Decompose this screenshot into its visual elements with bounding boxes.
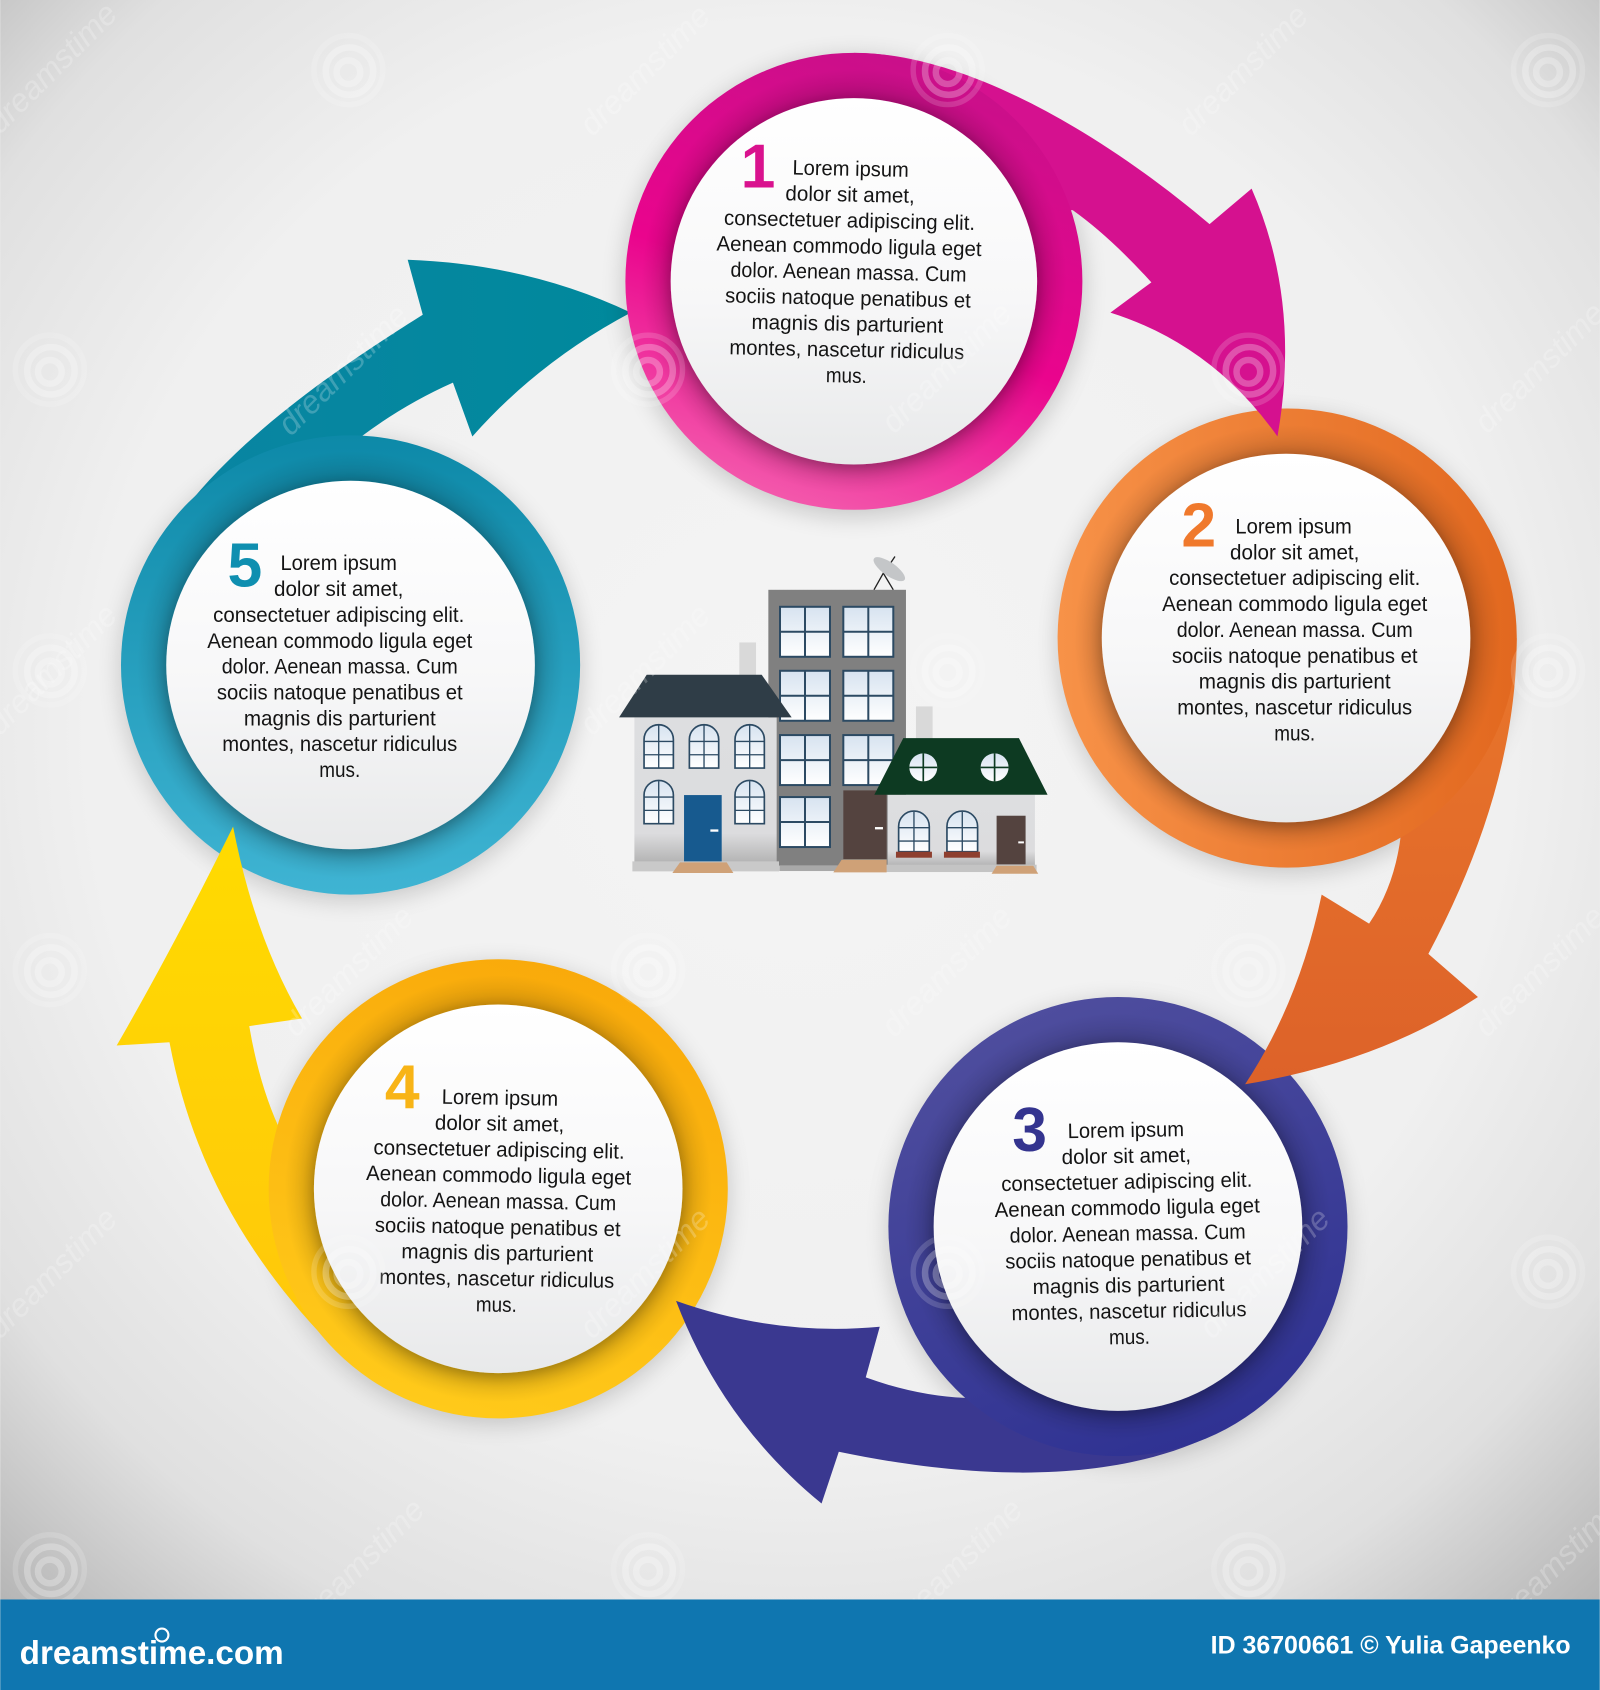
illustration: buildings xyxy=(619,553,1048,874)
ring: magenta xyxy=(625,53,1082,510)
text block 5 xyxy=(207,552,473,782)
text block 3: Lorem ipsum xyxy=(1067,1118,1184,1143)
white disc 2 xyxy=(1102,454,1470,822)
text block 3: mus. xyxy=(1109,1326,1150,1349)
number 1: 1 xyxy=(741,132,775,202)
number 5: 5 xyxy=(228,530,262,600)
white disc 4 xyxy=(314,1005,683,1373)
text block 3: magnis dis parturient xyxy=(1032,1273,1225,1299)
text block 2: Lorem ipsum xyxy=(1235,516,1352,539)
watermark pattern: dreamstime xyxy=(276,898,421,1043)
text block 4: dolor. Aenean massa. Cum xyxy=(380,1188,616,1215)
arrow: teal xyxy=(122,260,631,665)
footer credit: ID 36700661 © Yulia Gapeenko xyxy=(1211,1632,1571,1659)
ring: teal xyxy=(121,435,580,895)
arrow: magenta xyxy=(854,53,1285,437)
white disc 5 xyxy=(166,481,535,849)
text block 2 xyxy=(1162,516,1427,745)
text block 3: sociis natoque penatibus et xyxy=(1005,1246,1251,1274)
text block 2: Aenean commodo ligula eget xyxy=(1162,593,1427,616)
text block 5: dolor. Aenean massa. Cum xyxy=(222,656,458,679)
text block 5: dolor sit amet, xyxy=(274,578,403,601)
text block 2: montes, nascetur ridiculus xyxy=(1177,697,1412,720)
white disc 3 xyxy=(934,1042,1302,1411)
text block 1: dolor. Aenean massa. Cum xyxy=(730,259,967,287)
arrow: orange xyxy=(1245,638,1517,1084)
panel: step 1 xyxy=(624,53,1285,516)
text block 1: Lorem ipsum xyxy=(792,156,909,182)
watermark pattern: dreamstime xyxy=(1170,0,1315,142)
right house xyxy=(833,706,1048,874)
text block 2: consectetuer adipiscing elit. xyxy=(1169,567,1420,590)
arrow: yellow xyxy=(117,827,367,1350)
white disc 1 xyxy=(671,98,1037,465)
watermark pattern: dreamstime xyxy=(1192,1200,1337,1345)
text block 1: consectetuer adipiscing elit. xyxy=(724,207,975,235)
number 4: 4 xyxy=(385,1052,420,1122)
text block 2: sociis natoque penatibus et xyxy=(1172,645,1418,668)
text block 4: magnis dis parturient xyxy=(401,1240,594,1267)
watermark pattern: dreamstime xyxy=(874,295,1019,440)
text block 4: consectetuer adipiscing elit. xyxy=(373,1136,625,1164)
text block 1 xyxy=(714,155,984,390)
tower block xyxy=(768,590,906,871)
text block 5: sociis natoque penatibus et xyxy=(217,681,463,704)
text block 5: montes, nascetur ridiculus xyxy=(222,733,457,756)
text block 4 xyxy=(364,1084,633,1319)
text block 2: mus. xyxy=(1274,722,1315,745)
watermark pattern: dreamstime xyxy=(874,898,1019,1043)
text block 3: dolor. Aenean massa. Cum xyxy=(1009,1220,1246,1248)
text block 1: montes, nascetur ridiculus xyxy=(729,336,965,364)
text block 4: montes, nascetur ridiculus xyxy=(379,1266,615,1293)
text block 3: dolor sit amet, xyxy=(1061,1144,1191,1169)
text block 5: mus. xyxy=(319,759,360,782)
ring: orange xyxy=(1058,408,1517,868)
text block 4: sociis natoque penatibus et xyxy=(375,1214,621,1241)
text block 3: Aenean commodo ligula eget xyxy=(994,1194,1260,1222)
number 3: 3 xyxy=(1012,1095,1047,1165)
watermark pattern: dreamstime xyxy=(572,0,717,142)
text block 5: Lorem ipsum xyxy=(280,552,397,575)
panel: step 4 xyxy=(117,827,728,1424)
text block 2: magnis dis parturient xyxy=(1199,671,1391,694)
text block 2: dolor. Aenean massa. Cum xyxy=(1177,619,1413,642)
icon: satellite dish xyxy=(870,553,908,590)
text block 5: Aenean commodo ligula eget xyxy=(207,630,473,653)
text block 1: Aenean commodo ligula eget xyxy=(716,233,982,261)
text block 1: mus. xyxy=(826,364,867,388)
text block 4: dolor sit amet, xyxy=(435,1112,564,1137)
text block 4: Aenean commodo ligula eget xyxy=(366,1162,632,1190)
number 2: 2 xyxy=(1181,490,1216,560)
text block 4: mus. xyxy=(476,1293,517,1317)
ring: navy xyxy=(888,997,1348,1456)
text block 3: montes, nascetur ridiculus xyxy=(1011,1298,1247,1325)
arrow: navy xyxy=(676,1301,1280,1504)
text block 4: Lorem ipsum xyxy=(442,1086,558,1111)
panel: step 3 xyxy=(676,997,1348,1504)
footer logo: dreamstime.com xyxy=(20,1635,284,1672)
ring: yellow xyxy=(269,959,728,1418)
text block 3 xyxy=(993,1117,1262,1351)
panel: step 2 xyxy=(1058,408,1517,1084)
watermark pattern: dreamstime xyxy=(572,597,717,742)
text block 2: dolor sit amet, xyxy=(1230,541,1359,564)
watermark pattern: dreamstime xyxy=(885,1491,1030,1636)
watermark pattern: dreamstime xyxy=(287,1491,431,1636)
text block 1: magnis dis parturient xyxy=(751,311,944,338)
watermark pattern: dreamstime xyxy=(270,297,415,442)
text block 1: sociis natoque penatibus et xyxy=(725,284,971,313)
text block 5: consectetuer adipiscing elit. xyxy=(213,604,464,627)
text block 1: dolor sit amet, xyxy=(785,182,915,208)
watermark pattern: dreamstime xyxy=(572,1200,717,1345)
text block 5: magnis dis parturient xyxy=(244,707,436,730)
panel: step 5 xyxy=(121,260,631,900)
left house xyxy=(619,642,792,873)
footer bar xyxy=(0,1599,1600,1690)
text block 3: consectetuer adipiscing elit. xyxy=(1001,1169,1253,1196)
